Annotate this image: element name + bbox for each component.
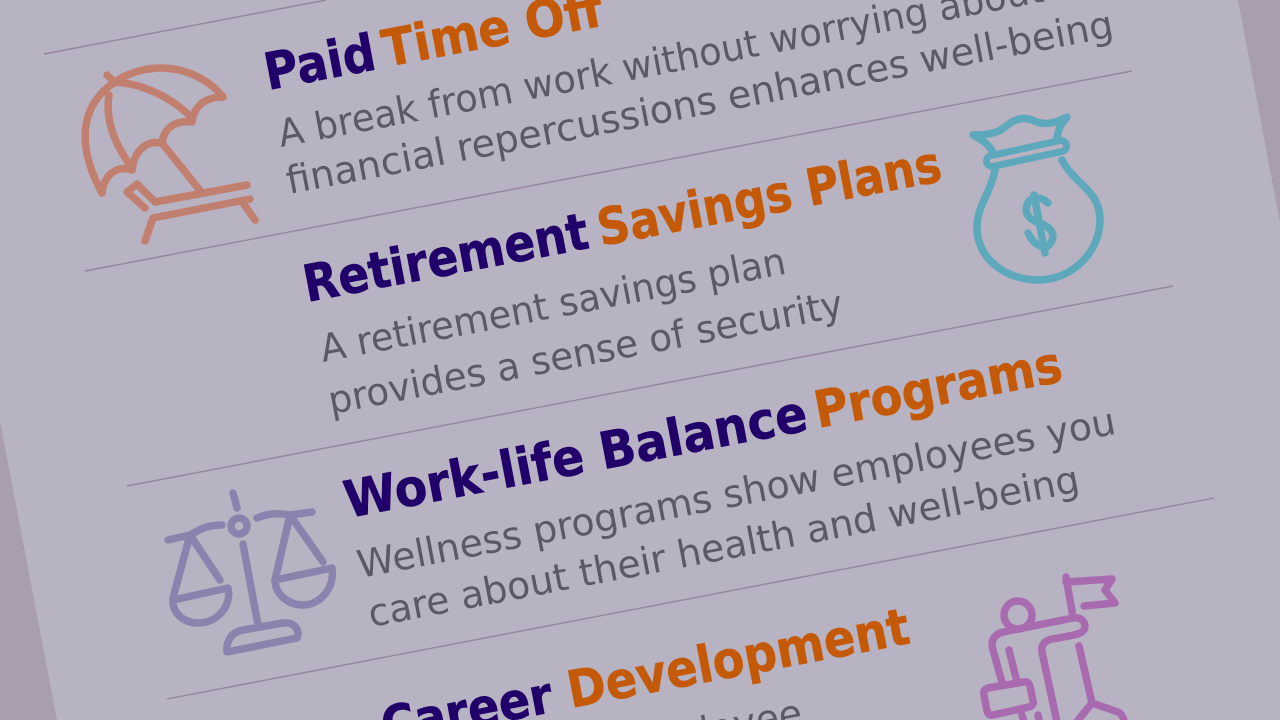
text: retirement description: provides a sense of security bbox=[324, 282, 846, 423]
heading: paid time off: Paid bbox=[259, 24, 380, 103]
heading: work-life balance programs: Programs bbox=[809, 336, 1067, 441]
icon: balance scales bbox=[168, 493, 332, 652]
section: work-life balance programs bbox=[168, 336, 1119, 652]
text: retirement description: A retirement savings plan bbox=[316, 239, 789, 371]
text: paid time off description: financial repercussions enhances well-being bbox=[282, 2, 1117, 203]
icon: beach umbrella and lounger bbox=[85, 68, 255, 241]
icon: person with flag and briefcase bbox=[984, 577, 1125, 720]
heading: retirement savings plans bbox=[298, 135, 946, 315]
section: retirement savings plans bbox=[298, 117, 1100, 423]
heading: retirement savings plans: Savings Plans bbox=[592, 135, 946, 259]
heading: work-life balance programs: Work-life Balance bbox=[339, 385, 812, 531]
icon: money bag bbox=[973, 117, 1100, 280]
heading: career development: Development bbox=[562, 598, 914, 720]
heading: retirement savings plans: Retirement bbox=[298, 203, 593, 315]
heading: paid time off bbox=[259, 0, 608, 103]
text: wellness description: care about their health and well-being bbox=[364, 457, 1083, 636]
section: paid time off bbox=[85, 0, 1117, 241]
heading: career development bbox=[376, 598, 914, 720]
text: wellness description: Wellness programs show employees you bbox=[353, 399, 1119, 587]
heading: work-life balance programs bbox=[339, 336, 1067, 531]
section: career development bbox=[376, 577, 1125, 720]
